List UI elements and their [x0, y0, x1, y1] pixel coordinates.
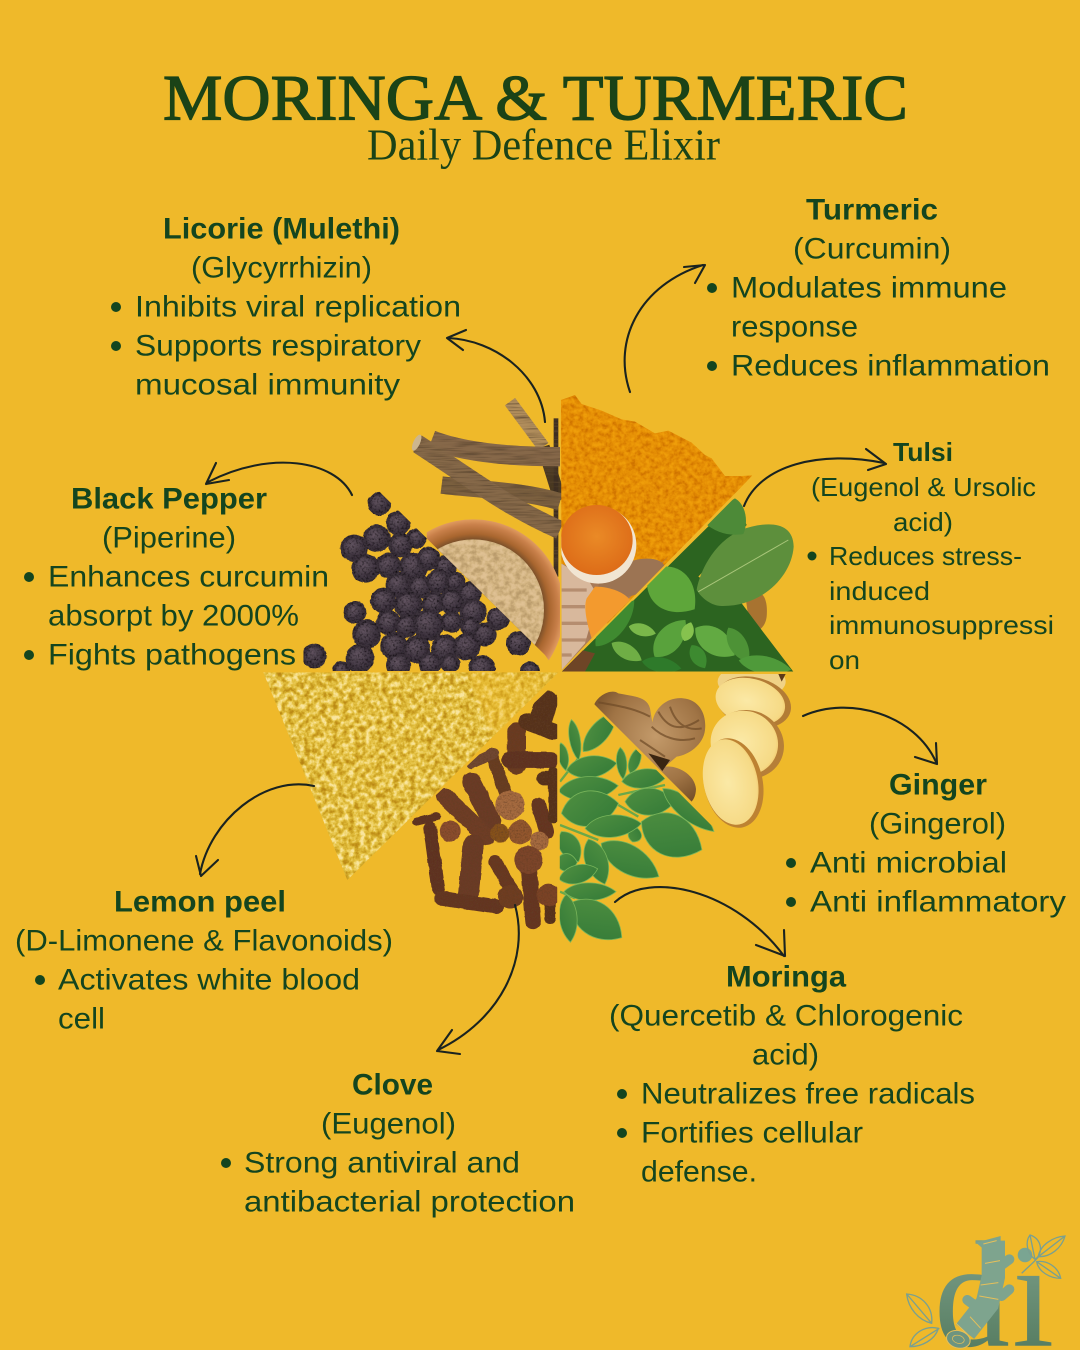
text block: tulsi: on [829, 645, 860, 675]
logo dot [1018, 1248, 1032, 1262]
text block: moringa: Neutralizes free radicals [641, 1078, 975, 1111]
moringa stems [560, 758, 665, 898]
text block: licorice: Supports respiratory [135, 330, 421, 363]
text block: licorice: Licorie (Mulethi) [163, 213, 400, 246]
tulsi pot and leaf mass [562, 522, 794, 672]
text block: clove [221, 1069, 575, 1219]
text block: tulsi: (Eugenol & Ursolic [811, 472, 1036, 502]
image: ginger slices [702, 674, 791, 828]
wooden bowl [426, 519, 560, 660]
text block: tulsi: acid) [893, 507, 953, 537]
text block: turmeric: Modulates immune [731, 272, 1007, 305]
text block: black pepper [24, 483, 329, 672]
text block: tulsi [808, 437, 1054, 675]
text block: black pepper: Fights pathogens [48, 639, 296, 672]
tulsi leaves [587, 498, 794, 678]
text block: ginger [786, 769, 1066, 919]
image: moringa leaves [560, 716, 714, 943]
text block: moringa: Moringa [726, 961, 846, 994]
text block: licorice: Inhibits viral replication [135, 291, 461, 324]
arrow: lemon peel [196, 784, 314, 876]
text block: black pepper: Enhances curcumin [48, 561, 329, 594]
licorice cut end [410, 433, 423, 452]
text block: ginger: Anti microbial [810, 847, 1007, 880]
text block: tulsi: immunosuppressi [829, 610, 1054, 640]
text block: turmeric: (Curcumin) [793, 233, 951, 266]
text block: clove: Clove [352, 1069, 433, 1102]
text block: black pepper: Black Pepper [71, 483, 267, 516]
text block: tulsi: Reduces stress- [829, 541, 1022, 571]
text block: black pepper: (Piperine) [102, 522, 236, 555]
arrow: black pepper [206, 463, 352, 495]
logo ginger root [944, 1236, 1009, 1350]
image: lemon peel [260, 665, 560, 882]
logo leaves [907, 1235, 1065, 1347]
text block: turmeric: Turmeric [806, 194, 938, 227]
text block: lemon peel [15, 886, 393, 1036]
text block: licorice: (Glycyrrhizin) [191, 252, 372, 285]
text block: ginger: (Gingerol) [869, 808, 1006, 841]
moringa leaflets [560, 716, 714, 943]
text block: lemon peel: cell [58, 1003, 105, 1036]
turmeric root [560, 505, 670, 670]
text block: lemon peel: (D-Limonene & Flavonoids) [15, 925, 393, 958]
text block: licorice: mucosal immunity [135, 369, 400, 402]
text block: moringa: acid) [752, 1039, 819, 1072]
text block: turmeric [707, 194, 1050, 383]
text block: moringa [609, 961, 975, 1189]
image: tulsi leaves [562, 498, 794, 678]
arrow: moringa [615, 887, 785, 956]
turmeric powder [555, 390, 762, 623]
image: turmeric powder and root [555, 390, 762, 670]
image: cloves [417, 702, 560, 922]
arrow: licorice [447, 330, 545, 422]
text block: lemon peel: Lemon peel [114, 886, 286, 919]
text block: clove: (Eugenol) [321, 1108, 456, 1141]
text block: moringa: (Quercetib & Chlorogenic [609, 1000, 963, 1033]
text block: tulsi: induced [829, 576, 930, 606]
arrow: turmeric [625, 265, 705, 392]
image: black peppercorns [304, 494, 538, 680]
text block: moringa: defense. [641, 1156, 757, 1189]
text block: tulsi: Tulsi [893, 437, 953, 467]
text block: ginger: Anti inflammatory [810, 886, 1066, 919]
clove heads [439, 790, 560, 909]
text block: clove: antibacterial protection [244, 1186, 575, 1219]
text block: moringa: Fortifies cellular [641, 1117, 863, 1150]
image: licorice sticks and powder bowl [412, 398, 562, 660]
image: ginger root [594, 692, 705, 803]
title: MORINGA & TURMERIC [163, 63, 908, 135]
text block: turmeric: Reduces inflammation [731, 350, 1050, 383]
text block: lemon peel: Activates white blood [58, 964, 360, 997]
subtitle: Daily Defence Elixir [367, 121, 720, 170]
text block: licorice [111, 213, 461, 402]
arrow: tulsi [744, 449, 886, 506]
text block: turmeric: response [731, 311, 858, 344]
licorice sticks [417, 402, 560, 577]
text block: clove: Strong antiviral and [244, 1147, 520, 1180]
arrow: clove [437, 905, 519, 1054]
text block: black pepper: absorpt by 2000% [48, 600, 299, 633]
arrow: ginger [803, 708, 937, 764]
logo [907, 1211, 1065, 1350]
text block: ginger: Ginger [889, 769, 987, 802]
